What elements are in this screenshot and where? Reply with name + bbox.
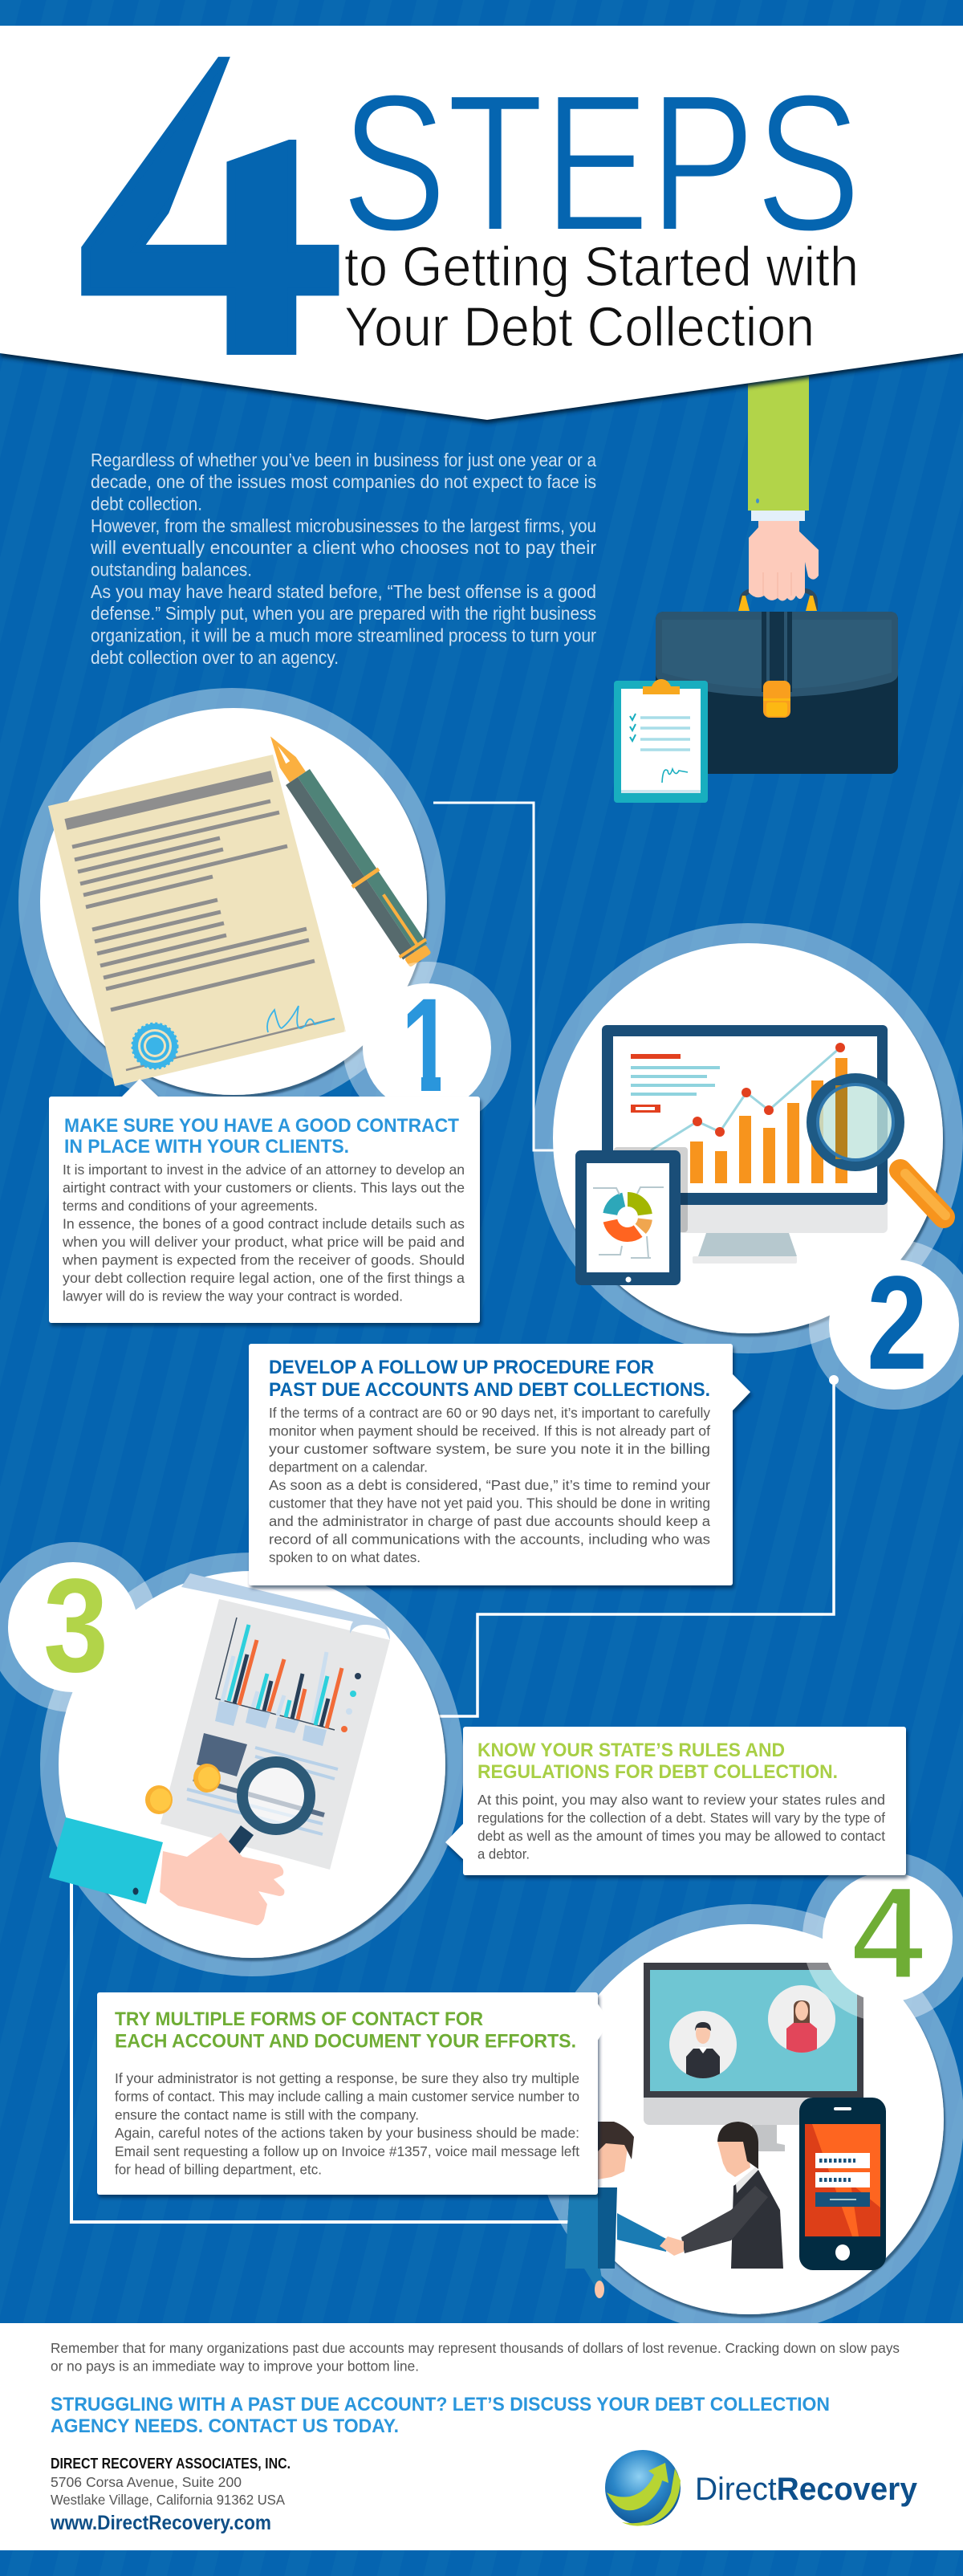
avatar: woman bbox=[768, 1985, 835, 2053]
card body bbox=[97, 1992, 610, 2195]
panel: step 3 circle bbox=[0, 1542, 464, 1976]
card body text: debt as well as the amount of times you may be allowed to contact bbox=[477, 1828, 885, 1844]
connector line step 3 to step 4 bbox=[71, 1878, 570, 2222]
call to action: AGENCY NEEDS. CONTACT US TODAY. bbox=[51, 2415, 399, 2437]
number 2: 2 bbox=[867, 1249, 928, 1398]
intro text block: defense.” Simply put, when you are prepared with the right business bbox=[91, 603, 596, 624]
card body text: customer that they have not yet paid you. This should be done in writing bbox=[269, 1495, 710, 1511]
number badge disc bbox=[363, 983, 491, 1112]
icon: signature bbox=[267, 1006, 335, 1032]
card body text: and the administrator in charge of past due accounts should keep a bbox=[269, 1513, 710, 1529]
panel: footer bbox=[0, 2323, 963, 2550]
illustration: hand carrying briefcase bbox=[614, 321, 898, 803]
illustration: report paper with chart bbox=[160, 1573, 390, 1870]
card body text: record of all communications with the accounts, including who was bbox=[269, 1532, 710, 1548]
card body text: Again, careful notes of the actions taken by your business should be made: bbox=[115, 2125, 579, 2141]
card body text: regulations for the collection of a debt. States will vary by the type of bbox=[477, 1809, 885, 1825]
illustration: monitor with chart bbox=[602, 1025, 888, 1264]
intro text block: will eventually encounter a client who chooses not to pay their bbox=[90, 537, 596, 558]
company address: 5706 Corsa Avenue, Suite 200 bbox=[51, 2474, 242, 2490]
website: www.DirectRecovery.com bbox=[50, 2512, 271, 2534]
panel: step 1 card bbox=[49, 1079, 480, 1323]
card body bbox=[249, 1344, 750, 1585]
number badge ring bbox=[809, 1239, 963, 1410]
card body text: forms of contact. This may include calling a main customer service number to bbox=[115, 2089, 579, 2105]
card body text: airtight contract with your customers or clients. This lays out the bbox=[63, 1180, 465, 1196]
card body text: lawyer will do is review the way your contract is worded. bbox=[63, 1288, 403, 1304]
connector line step 1 to step 2 bbox=[433, 803, 562, 1150]
card body bbox=[49, 1079, 480, 1323]
card body text: If the terms of a contract are 60 or 90 days net, it’s important to carefully bbox=[269, 1405, 710, 1421]
number badge disc bbox=[829, 1260, 959, 1390]
company address bbox=[51, 2456, 291, 2508]
illustration: contract document bbox=[48, 755, 346, 1086]
header white banner bbox=[0, 26, 963, 423]
icon: briefcase handle bbox=[738, 590, 817, 611]
icon: tablet with donut chart bbox=[575, 1150, 681, 1285]
intro text block bbox=[90, 450, 596, 668]
number badge ring bbox=[802, 1852, 963, 2022]
icon: hand bbox=[749, 521, 819, 600]
card body text: ensure the contact name is still with the company. bbox=[115, 2106, 419, 2122]
intro text block: outstanding balances. bbox=[91, 559, 252, 580]
card heading: MAKE SURE YOU HAVE A GOOD CONTRACT bbox=[64, 1115, 459, 1137]
connector start dot bbox=[829, 1375, 839, 1385]
card heading: EACH ACCOUNT AND DOCUMENT YOUR EFFORTS. bbox=[115, 2031, 576, 2052]
intro text block: decade, one of the issues most companies do not expect to face is bbox=[91, 471, 596, 492]
large ring bbox=[533, 923, 963, 1353]
large disc bbox=[553, 943, 943, 1333]
card heading: TRY MULTIPLE FORMS OF CONTACT FOR bbox=[115, 2008, 483, 2030]
icon: hand and cuff bbox=[49, 1817, 284, 1925]
intro text block: However, from the smallest microbusinesses to the largest firms, you bbox=[91, 515, 596, 536]
connector line step 2 to step 3 bbox=[433, 1375, 839, 1716]
card body text bbox=[62, 1162, 465, 1304]
intro text block: organization, it will be a much more streamlined process to turn your bbox=[91, 625, 596, 645]
card body text: your debt collection require legal action, one of the first things a bbox=[63, 1270, 465, 1286]
card body text bbox=[269, 1405, 710, 1565]
illustration: video call monitor bbox=[644, 1963, 863, 2151]
card body text: a debtor. bbox=[477, 1846, 530, 1862]
call to action: STRUGGLING WITH A PAST DUE ACCOUNT? LET’S DISCUSS YOUR DEBT COLLECTION bbox=[51, 2394, 830, 2415]
card body text: In essence, the bones of a good contract include details such as bbox=[63, 1215, 465, 1231]
card heading: PAST DUE ACCOUNTS AND DEBT COLLECTIONS. bbox=[269, 1379, 710, 1401]
card heading: DEVELOP A FOLLOW UP PROCEDURE FOR bbox=[269, 1357, 654, 1378]
company address: DIRECT RECOVERY ASSOCIATES, INC. bbox=[51, 2456, 291, 2472]
card body text: spoken to on what dates. bbox=[269, 1549, 421, 1565]
card body bbox=[445, 1727, 906, 1875]
panel: step 2 circle bbox=[533, 923, 963, 1410]
intro text block: debt collection over to an agency. bbox=[91, 647, 339, 668]
number 1: 1 bbox=[401, 971, 453, 1120]
number badge ring bbox=[0, 1542, 158, 1712]
large ring bbox=[40, 1553, 464, 1976]
number 4: 4 bbox=[851, 1859, 924, 2008]
large disc bbox=[554, 1924, 944, 2314]
title line 3: Your Debt Collection bbox=[344, 295, 815, 358]
logo globe bbox=[605, 2450, 681, 2526]
intro text block: debt collection. bbox=[91, 493, 202, 514]
panel: step 3 card bbox=[445, 1727, 906, 1875]
card body text: If your administrator is not getting a response, be sure they also try multiple bbox=[115, 2070, 579, 2086]
number badge disc bbox=[823, 1872, 953, 2002]
card body text: terms and conditions of your agreements. bbox=[63, 1198, 318, 1214]
card heading bbox=[64, 1115, 459, 1158]
card heading bbox=[115, 2008, 576, 2052]
footer white panel bbox=[0, 2323, 963, 2550]
card body text: Email sent requesting a follow up on Invoice #1357, voice mail message left bbox=[115, 2143, 579, 2159]
card heading: IN PLACE WITH YOUR CLIENTS. bbox=[64, 1136, 349, 1158]
call to action bbox=[51, 2394, 830, 2437]
number badge ring bbox=[343, 962, 511, 1130]
panel: step 4 card bbox=[97, 1992, 610, 2195]
icon: seal bbox=[132, 1023, 177, 1068]
illustration: right businessman bbox=[681, 2122, 783, 2269]
card heading: REGULATIONS FOR DEBT COLLECTION. bbox=[477, 1761, 838, 1783]
card body text: department on a calendar. bbox=[269, 1459, 428, 1475]
panel: step 2 card bbox=[249, 1344, 750, 1585]
card body text: when payment is expected from the receiver of goods. Should bbox=[62, 1252, 465, 1268]
panel: step 1 circle bbox=[18, 688, 511, 1130]
card body text: As soon as a debt is considered, “Past due,” it’s time to remind your bbox=[269, 1477, 710, 1493]
icon: green sleeve bbox=[748, 321, 809, 511]
large ring bbox=[18, 688, 445, 1115]
card body text: when you will deliver your product, what price will be paid and bbox=[62, 1234, 465, 1250]
icon: magnifying glass bbox=[230, 1762, 310, 1853]
icon: clipboard checklist bbox=[614, 679, 708, 803]
card heading: KNOW YOUR STATE’S RULES AND bbox=[477, 1740, 785, 1761]
closing paragraph: Remember that for many organizations past due accounts may represent thousands of dollars of lost revenue. Cracking down on slow pays bbox=[51, 2340, 900, 2356]
card body text: It is important to invest in the advice of an attorney to develop an bbox=[63, 1162, 465, 1178]
logo wordmark: DirectRecovery bbox=[695, 2472, 918, 2507]
banner shadow bbox=[0, 345, 963, 423]
panel: step 4 circle bbox=[534, 1852, 963, 2334]
number 3: 3 bbox=[43, 1552, 108, 1700]
intro text block: As you may have heard stated before, “The best offense is a good bbox=[91, 581, 596, 602]
icon: magnifying glass bbox=[812, 1079, 945, 1217]
card body text: At this point, you may also want to review your states rules and bbox=[477, 1792, 885, 1808]
large disc bbox=[40, 708, 427, 1095]
title line 2: to Getting Started with bbox=[344, 235, 859, 298]
title bbox=[79, 0, 861, 441]
avatar: man bbox=[669, 2011, 737, 2079]
card body text: your customer software system, be sure you note it in the billing bbox=[269, 1441, 710, 1457]
icon: briefcase bbox=[656, 612, 898, 774]
company address: Westlake Village, California 91362 USA bbox=[51, 2492, 285, 2508]
icon: shirt cuff bbox=[751, 511, 805, 521]
card heading bbox=[477, 1740, 838, 1783]
large ring bbox=[534, 1904, 963, 2334]
closing paragraph bbox=[51, 2340, 900, 2375]
connector path bbox=[433, 1380, 834, 1716]
card body text bbox=[477, 1792, 885, 1862]
logo: Direct Recovery bbox=[605, 2450, 918, 2526]
large disc bbox=[59, 1571, 445, 1958]
number badge disc bbox=[8, 1562, 138, 1692]
banner shape bbox=[0, 26, 963, 420]
intro text block: Regardless of whether you’ve been in business for just one year or a bbox=[91, 450, 596, 470]
icon: coins bbox=[145, 1764, 221, 1814]
card body text bbox=[115, 2070, 579, 2177]
card heading bbox=[269, 1357, 710, 1401]
illustration: left businessman bbox=[565, 2122, 684, 2298]
closing paragraph: or no pays is an immediate way to improve your bottom line. bbox=[51, 2358, 419, 2375]
illustration: smartphone login bbox=[799, 2098, 886, 2270]
card body text: for head of billing department, etc. bbox=[115, 2161, 322, 2177]
icon: fountain pen bbox=[257, 727, 434, 969]
card body text: monitor when payment should be received. If this is not already part of bbox=[269, 1422, 710, 1439]
